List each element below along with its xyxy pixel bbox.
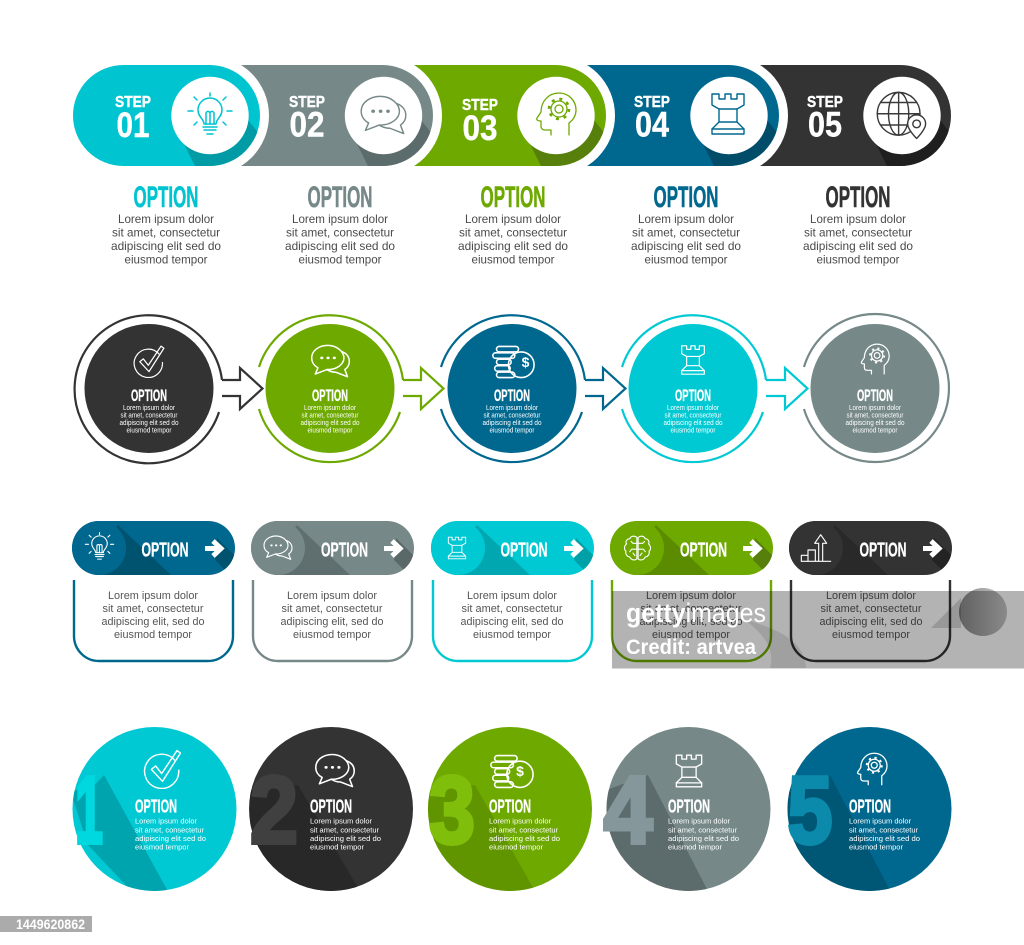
flow node 2: [259, 315, 403, 462]
flow node 1: sit amet, consectetur: [120, 412, 178, 420]
numbered circle 3: $: [516, 763, 524, 779]
arrow 4: [766, 368, 808, 409]
numbered circle 2: OPTION: [310, 796, 352, 816]
numbered circle 3: adipiscing elit sed do: [489, 834, 560, 843]
step 5 pill: [760, 65, 951, 166]
caption 3: OPTION: [480, 181, 546, 214]
caption 1: sit amet, consectetur: [112, 226, 220, 240]
numbered circle 2: eiusmod tempor: [310, 842, 364, 852]
numbered circle 1: OPTION: [135, 796, 177, 816]
numbered circle 4: eiusmod tempor: [668, 842, 722, 852]
arrow 1: [222, 368, 262, 409]
card 4: sit amet, consectetur: [640, 603, 742, 615]
step 5 pill: STEP: [807, 94, 843, 111]
card 2: adipiscing elit, sed do: [280, 616, 384, 628]
flow node 3: adipiscing elit sed do: [482, 420, 542, 427]
caption 5: adipiscing elit sed do: [803, 239, 913, 253]
arrow 2: [403, 368, 444, 409]
step 3 pill: STEP: [462, 97, 498, 114]
flow node 3: OPTION: [494, 387, 530, 405]
flow node 5: Lorem ipsum dolor: [849, 405, 902, 412]
option cards row: [72, 521, 964, 661]
card 4: eiusmod tempor: [652, 629, 730, 641]
flow node 3: [441, 315, 585, 462]
flow node 1: Lorem ipsum dolor: [123, 405, 176, 412]
numbered circle 3: Lorem ipsum dolor: [489, 816, 552, 826]
numbered circle 5: [787, 727, 952, 900]
numbered circle 2: [249, 727, 413, 900]
card 4: adipiscing elit, sed do: [640, 616, 742, 628]
step 3 pill: [414, 65, 606, 166]
step ribbon: [73, 65, 951, 166]
caption 4: sit amet, consectetur: [632, 226, 740, 240]
caption 5: sit amet, consectetur: [804, 226, 912, 240]
flow node 4: eiusmod tempor: [670, 428, 716, 434]
watermark credit: Credit: artvea: [626, 636, 756, 659]
numbered circle 1: [70, 727, 236, 895]
flow node 2: Lorem ipsum dolor: [304, 405, 357, 412]
card 1: eiusmod tempor: [114, 629, 192, 641]
step 2 pill: 02: [290, 106, 324, 144]
flow node 5: [804, 314, 949, 462]
card 1: sit amet, consectetur: [102, 603, 204, 615]
step 1 pill: STEP: [115, 94, 151, 111]
flow node 4: OPTION: [675, 387, 711, 405]
card 1: Lorem ipsum dolor: [108, 590, 198, 602]
card 4: Lorem ipsum dolor: [646, 590, 736, 602]
step 4 pill: [587, 65, 779, 166]
card 4: OPTION: [680, 539, 727, 562]
step 4 pill: 04: [635, 106, 669, 144]
watermark banner: [612, 588, 1024, 668]
flow node 5: eiusmod tempor: [852, 428, 898, 434]
numbered circle 4: adipiscing elit sed do: [668, 834, 739, 843]
step 1 pill: 01: [116, 106, 150, 145]
card 1: [72, 521, 247, 661]
arrow 3: [585, 368, 626, 409]
circle flow row: [75, 314, 949, 463]
numbered circle 4: Lorem ipsum dolor: [668, 816, 731, 826]
card 5: [789, 521, 964, 661]
numbered circle 4: OPTION: [668, 796, 710, 816]
numbered circle 5: sit amet, consectetur: [849, 826, 918, 834]
caption 4: OPTION: [654, 181, 718, 214]
card 5: OPTION: [860, 539, 906, 562]
caption 1: [111, 181, 221, 266]
step 4 pill: STEP: [634, 94, 670, 111]
caption 4: Lorem ipsum dolor: [638, 212, 734, 226]
flow node 3: sit amet, consectetur: [484, 412, 541, 420]
card 2: OPTION: [321, 539, 368, 562]
numbered circle 1: sit amet, consectetur: [135, 826, 204, 834]
numbered circle 2: Lorem ipsum dolor: [310, 816, 373, 826]
card 3: Lorem ipsum dolor: [467, 590, 557, 602]
flow node 3: $: [522, 354, 530, 370]
card 3: [431, 521, 606, 661]
caption 5: eiusmod tempor: [816, 252, 900, 266]
flow node 1: OPTION: [131, 387, 167, 405]
flow node 2: sit amet, consectetur: [302, 412, 359, 420]
caption 5: OPTION: [826, 181, 890, 214]
card 3: eiusmod tempor: [473, 629, 551, 641]
caption 4: eiusmod tempor: [644, 252, 728, 266]
card 3: OPTION: [500, 539, 548, 562]
numbered circle 5: OPTION: [849, 796, 891, 816]
numbered circle 5: 5: [788, 757, 832, 864]
caption 1: eiusmod tempor: [124, 252, 208, 266]
flow node 1: [75, 315, 222, 463]
numbered circle 3: eiusmod tempor: [489, 842, 543, 852]
flow node 3: Lorem ipsum dolor: [486, 405, 539, 412]
step 2 pill: STEP: [289, 94, 325, 111]
step 2 pill: [241, 65, 433, 166]
caption 2: OPTION: [308, 181, 372, 214]
caption 3: Lorem ipsum dolor: [465, 212, 561, 226]
card 1: adipiscing elit, sed do: [102, 616, 204, 628]
numbered circle 1: eiusmod tempor: [135, 842, 189, 852]
caption 3: adipiscing elit sed do: [458, 239, 568, 253]
caption 4: adipiscing elit sed do: [631, 239, 741, 253]
numbered circle 3: [428, 727, 592, 900]
watermark logo: gettyimages: [626, 598, 766, 628]
card 1: OPTION: [142, 539, 188, 562]
flow node 2: eiusmod tempor: [308, 428, 353, 434]
step 1 pill: [73, 65, 270, 166]
caption 1: adipiscing elit sed do: [111, 239, 221, 253]
numbered circle 1: Lorem ipsum dolor: [135, 816, 198, 826]
numbered circle 4: 4: [604, 757, 652, 864]
card 3: sit amet, consectetur: [462, 603, 563, 615]
numbered circle 2: sit amet, consectetur: [310, 826, 379, 834]
card 3: adipiscing elit, sed do: [460, 616, 564, 628]
flow node 4: sit amet, consectetur: [664, 412, 722, 420]
numbered circle 3: 3: [429, 757, 475, 864]
card 5: sit amet, consectetur: [820, 603, 922, 615]
flow node 5: adipiscing elit sed do: [846, 420, 905, 427]
card 5: adipiscing elit, sed do: [820, 616, 922, 628]
card 4: [610, 521, 785, 661]
numbered circle 4: [604, 727, 770, 900]
numbered circle 5: eiusmod tempor: [849, 842, 903, 852]
flow node 2: OPTION: [312, 387, 348, 405]
caption 3: eiusmod tempor: [472, 252, 554, 266]
caption 2: sit amet, consectetur: [286, 226, 394, 240]
flow node 1: adipiscing elit sed do: [120, 420, 179, 427]
numbered circle 1: 1: [75, 757, 103, 864]
caption 5: Lorem ipsum dolor: [810, 212, 906, 226]
flow node 4: [622, 315, 766, 462]
caption 5: [803, 181, 913, 266]
numbered circle 3: OPTION: [489, 796, 531, 816]
flow node 2: adipiscing elit sed do: [300, 420, 360, 427]
card 2: sit amet, consectetur: [282, 603, 383, 615]
flow node 1: eiusmod tempor: [126, 428, 172, 434]
card 5: Lorem ipsum dolor: [826, 590, 916, 602]
card 2: eiusmod tempor: [293, 629, 371, 641]
numbered circle 2: adipiscing elit sed do: [310, 834, 381, 843]
numbered circle 5: adipiscing elit sed do: [849, 834, 920, 843]
caption 2: eiusmod tempor: [298, 252, 382, 266]
flow node 5: sit amet, consectetur: [846, 412, 904, 420]
flow node 3: eiusmod tempor: [490, 428, 535, 434]
step captions: [111, 181, 913, 266]
numbered circle 2: 2: [250, 757, 298, 864]
numbered circle 1: adipiscing elit sed do: [135, 834, 206, 843]
caption 4: [631, 181, 741, 266]
numbered circle 3: sit amet, consectetur: [489, 826, 558, 834]
step 5 pill: 05: [808, 106, 842, 144]
flow node 4: adipiscing elit sed do: [664, 420, 723, 427]
caption 3: sit amet, consectetur: [459, 226, 567, 240]
flow node 5: OPTION: [857, 387, 893, 405]
numbered circle 5: Lorem ipsum dolor: [849, 816, 912, 826]
image id tag: 1449620862: [16, 917, 85, 932]
card 2: [251, 521, 426, 661]
caption 1: OPTION: [134, 181, 198, 214]
card 2: Lorem ipsum dolor: [287, 590, 377, 602]
card 5: eiusmod tempor: [832, 629, 910, 641]
numbered circle 4: sit amet, consectetur: [668, 826, 737, 834]
caption 2: adipiscing elit sed do: [285, 239, 395, 253]
caption 1: Lorem ipsum dolor: [118, 212, 214, 226]
caption 2: Lorem ipsum dolor: [292, 212, 388, 226]
numbered circles row: [70, 727, 952, 900]
caption 2: [285, 181, 395, 266]
flow node 4: Lorem ipsum dolor: [667, 405, 720, 412]
step 3 pill: 03: [462, 109, 498, 148]
caption 3: [458, 181, 568, 266]
